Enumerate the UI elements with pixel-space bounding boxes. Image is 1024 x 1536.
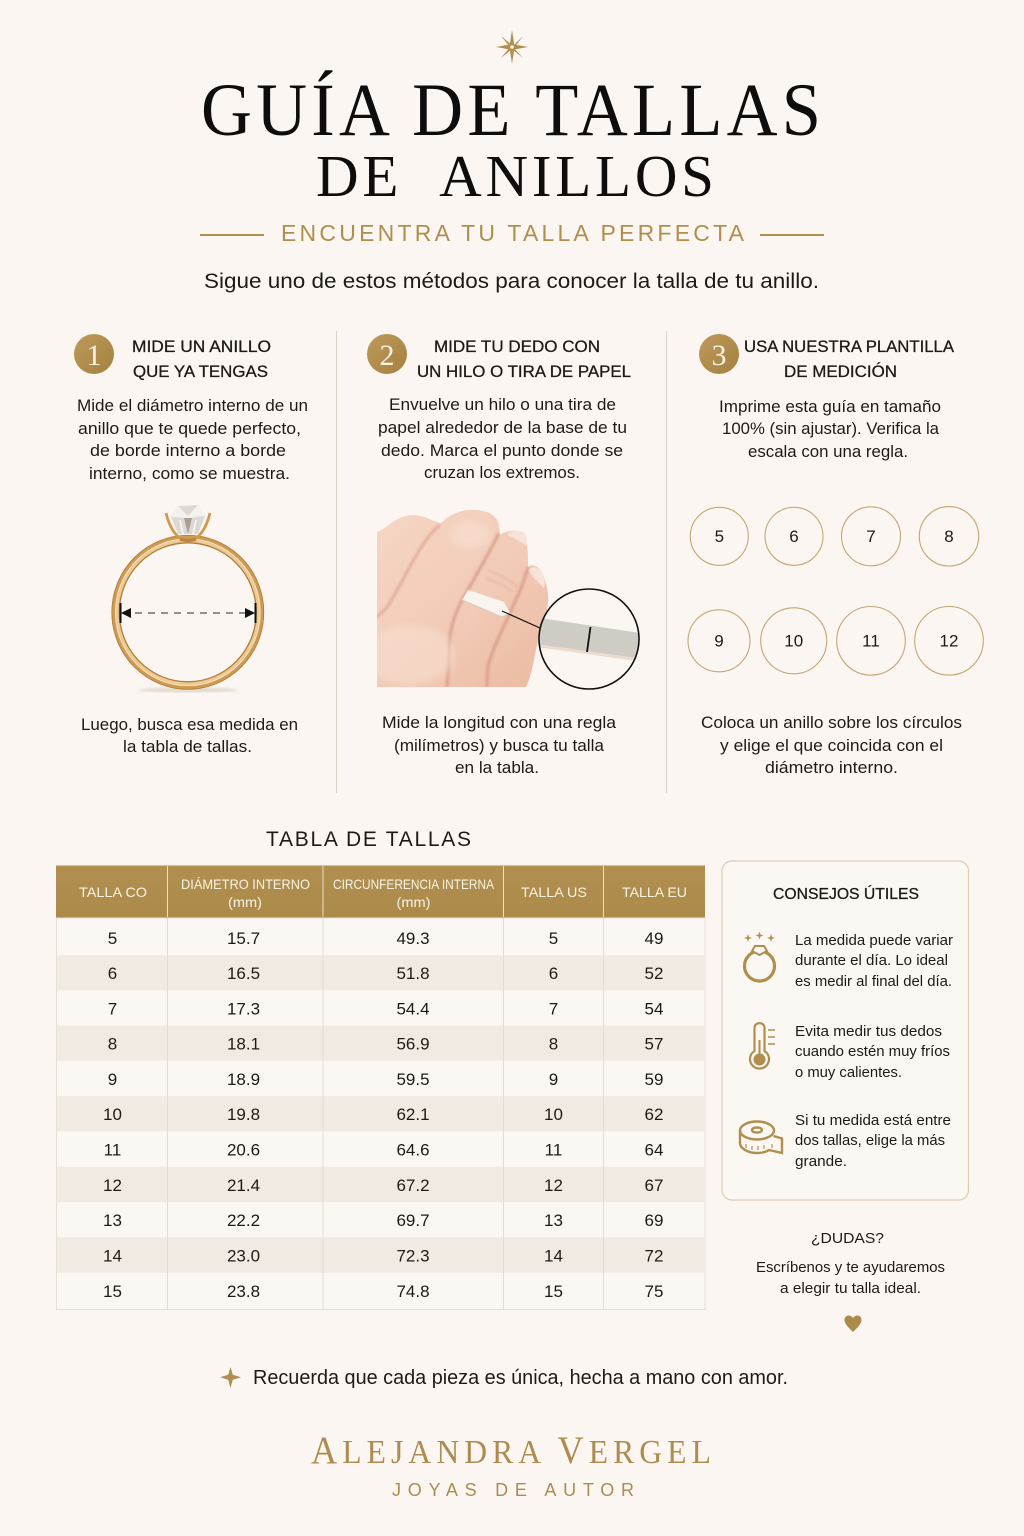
table rows: 6 [108,964,117,983]
sizing circles template: 5 [715,527,724,546]
table rows: 59.5 [396,1070,430,1089]
sizing circles template: 8 [944,527,954,546]
table heading: TABLA DE TALLAS [266,828,471,851]
illustration: hand with paper strip and magnifier [365,510,640,689]
step 3 instructions: escala con una regla. [748,443,908,461]
step 3 heading: DE MEDICIÓN [784,362,897,381]
step 2 closing note: en la tabla. [455,759,539,777]
table rows: 49.3 [396,929,430,948]
table rows: 52 [645,964,663,983]
table rows: 72 [645,1246,663,1266]
table rows [103,929,663,1301]
step 3 instructions: Imprime esta guía en tamaño [719,398,941,416]
tip 1 text: La medida puede variar [795,933,953,949]
tip 3 text: grande. [795,1154,847,1170]
step 2 closing note: Mide la longitud con una regla [382,714,617,732]
table rows: 11 [104,1140,121,1160]
icon: heart [844,1316,862,1332]
step 2 heading: UN HILO O TIRA DE PAPEL [417,363,631,381]
step 1 instructions: de borde interno a borde [90,442,286,460]
icon: thermometer [750,1023,775,1069]
table rows: 75 [645,1282,663,1301]
table header row [56,866,705,918]
tip 3 text [795,1113,951,1170]
step 1 instructions: anillo que te quede perfecto, [78,420,301,438]
tip 2 text: o muy calientes. [795,1065,902,1081]
step 3 closing note: diámetro interno. [765,759,898,777]
icon: top star ornament [496,30,528,64]
table rows: 57 [645,1034,663,1054]
table rows: 18.1 [227,1034,260,1054]
table rows: 7 [108,1000,117,1018]
table rows: 10 [103,1105,122,1124]
panel: useful tips [722,861,968,1200]
step 2 instructions: Envuelve un hilo o una tira de [389,396,616,414]
questions note: ¿DUDAS? [811,1230,884,1247]
table rows: 54.4 [396,1000,430,1018]
table rows: 69.7 [396,1211,430,1230]
step 1 instructions: interno, como se muestra. [89,465,290,483]
table rows: 19.8 [227,1105,260,1124]
step 2 heading [417,338,631,381]
table header row: TALLA US [521,884,587,900]
table header row: TALLA EU [622,884,687,900]
questions note: Escríbenos y te ayudaremos [756,1260,945,1276]
sizing circles template: 9 [714,632,724,650]
table rows: 17.3 [227,1000,260,1018]
table rows: 54 [645,1000,663,1018]
table rows: 56.9 [396,1034,430,1054]
step 3 closing note: Coloca un anillo sobre los círculos [701,714,962,732]
questions note [756,1230,945,1297]
panel: step 3 use the template [688,334,983,777]
table header row: TALLA CO [79,884,147,900]
step 3 instructions [719,398,941,461]
icon: gold ring with diamond and measurement arrow [112,505,264,692]
tip 3 text: Si tu medida está entre [795,1113,951,1129]
intro text: Sigue uno de estos métodos para conocer la talla de tu anillo. [204,269,819,293]
tip 1 text: es medir al final del día. [795,974,952,990]
step 1 number badge [74,334,114,374]
tip 1 text: durante el día. Lo ideal [795,953,948,969]
step 3 number badge: 3 [712,339,726,372]
tip 3 text: dos tallas, elige la más [795,1133,945,1149]
table rows: 74.8 [396,1282,430,1301]
table rows: 12 [103,1176,122,1195]
panel: step 2 measure your finger [365,334,640,777]
step 1 heading [132,338,271,381]
step 1 instructions: Mide el diámetro interno de un [77,397,308,415]
table rows: 59 [645,1070,663,1089]
step 3 heading: USA NUESTRA PLANTILLA [744,338,954,356]
table rows: 62 [645,1105,663,1124]
table rows: 51.8 [396,964,430,983]
step 1 closing note: la tabla de tallas. [123,738,252,756]
table rows: 7 [549,1000,558,1018]
table rows: 11 [545,1140,562,1160]
table rows: 67 [645,1176,663,1195]
step 2 closing note: (milímetros) y busca tu talla [394,737,605,755]
step 1 closing note [81,716,298,756]
sizing circles template [688,507,983,675]
table rows: 9 [108,1070,117,1089]
tip 2 text: cuando estén muy fríos [795,1044,950,1060]
table rows: 13 [544,1211,563,1230]
tip 1 text [795,933,953,990]
table rows: 16.5 [227,964,260,983]
table rows: 15.7 [227,929,260,948]
sizing circles template: 7 [866,527,876,546]
tips heading: CONSEJOS ÚTILES [773,884,919,903]
step 2 number badge: 2 [380,339,394,372]
table rows: 5 [108,929,117,948]
size table [56,866,705,1310]
step 3 closing note [701,714,962,777]
step 1 instructions [77,397,308,483]
step 2 heading: MIDE TU DEDO CON [434,338,600,356]
icon: four point star [220,1367,241,1388]
title: DE ANILLOS [316,143,714,209]
subtitle with rules: ENCUENTRA TU TALLA PERFECTA [281,220,745,246]
table rows: 64 [645,1140,663,1160]
table rows: 23.0 [227,1246,260,1266]
panel: step 1 measure a ring [74,334,308,756]
table rows: 67.2 [396,1176,430,1195]
step 3 instructions: 100% (sin ajustar). Verifica la [722,420,940,438]
step 1 heading: QUE YA TENGAS [133,363,268,381]
table rows: 15 [103,1282,122,1301]
sizing circles template: 12 [940,632,958,650]
table rows: 64.6 [396,1140,430,1160]
title: GUÍA DE TALLAS [201,68,821,151]
sizing circles template: 6 [789,527,799,546]
table rows: 14 [103,1246,122,1266]
step 2 instructions: dedo. Marca el punto donde se [381,442,623,460]
table rows: 18.9 [227,1070,260,1089]
table rows: 15 [544,1282,563,1301]
table header row: (mm) [396,894,430,910]
step 1 number badge: 1 [86,339,102,372]
table header row: CIRCUNFERENCIA INTERNA [333,876,495,892]
step 2 instructions [378,396,627,482]
table rows: 49 [645,929,663,948]
sizing circles template: 10 [784,632,803,650]
table rows: 62.1 [396,1105,430,1124]
step 3 number badge [699,334,739,374]
closing message: Recuerda que cada pieza es única, hecha a mano con amor. [253,1367,788,1389]
table rows: 6 [549,964,558,983]
brand tagline: JOYAS DE AUTOR [392,1480,634,1500]
table rows: 72.3 [396,1246,430,1266]
table rows: 12 [544,1176,563,1195]
icon: ring with sparkles [744,932,775,981]
step 3 closing note: y elige el que coincida con el [720,737,943,755]
step 2 instructions: cruzan los extremos. [424,464,580,482]
tip 2 text: Evita medir tus dedos [795,1024,942,1040]
table rows: 21.4 [227,1176,260,1195]
step 1 closing note: Luego, busca esa medida en [81,716,298,734]
step 3 heading [744,338,954,381]
table rows: 20.6 [227,1140,260,1160]
tip 2 text [795,1024,950,1081]
table rows: 10 [544,1105,563,1124]
sizing circles template: 11 [862,632,880,650]
step 2 closing note [382,714,617,777]
table rows: 5 [549,929,558,948]
title [201,68,821,209]
table header row: DIÁMETRO INTERNO [181,876,310,892]
table rows: 13 [103,1211,122,1230]
step 2 number badge [367,334,407,374]
table rows: 22.2 [227,1211,260,1230]
table rows: 23.8 [227,1282,260,1301]
table rows: 9 [549,1070,558,1089]
brand name: ALEJANDRA VERGEL [311,1429,711,1472]
icon: measuring tape [740,1122,782,1153]
table header row: (mm) [228,894,262,910]
questions note: a elegir tu talla ideal. [780,1281,921,1297]
table rows: 14 [544,1246,563,1266]
table rows: 8 [108,1034,117,1054]
table rows: 69 [645,1211,663,1230]
table rows: 8 [549,1034,558,1054]
step 1 heading: MIDE UN ANILLO [132,338,271,356]
step 2 instructions: papel alrededor de la base de tu [378,419,627,437]
